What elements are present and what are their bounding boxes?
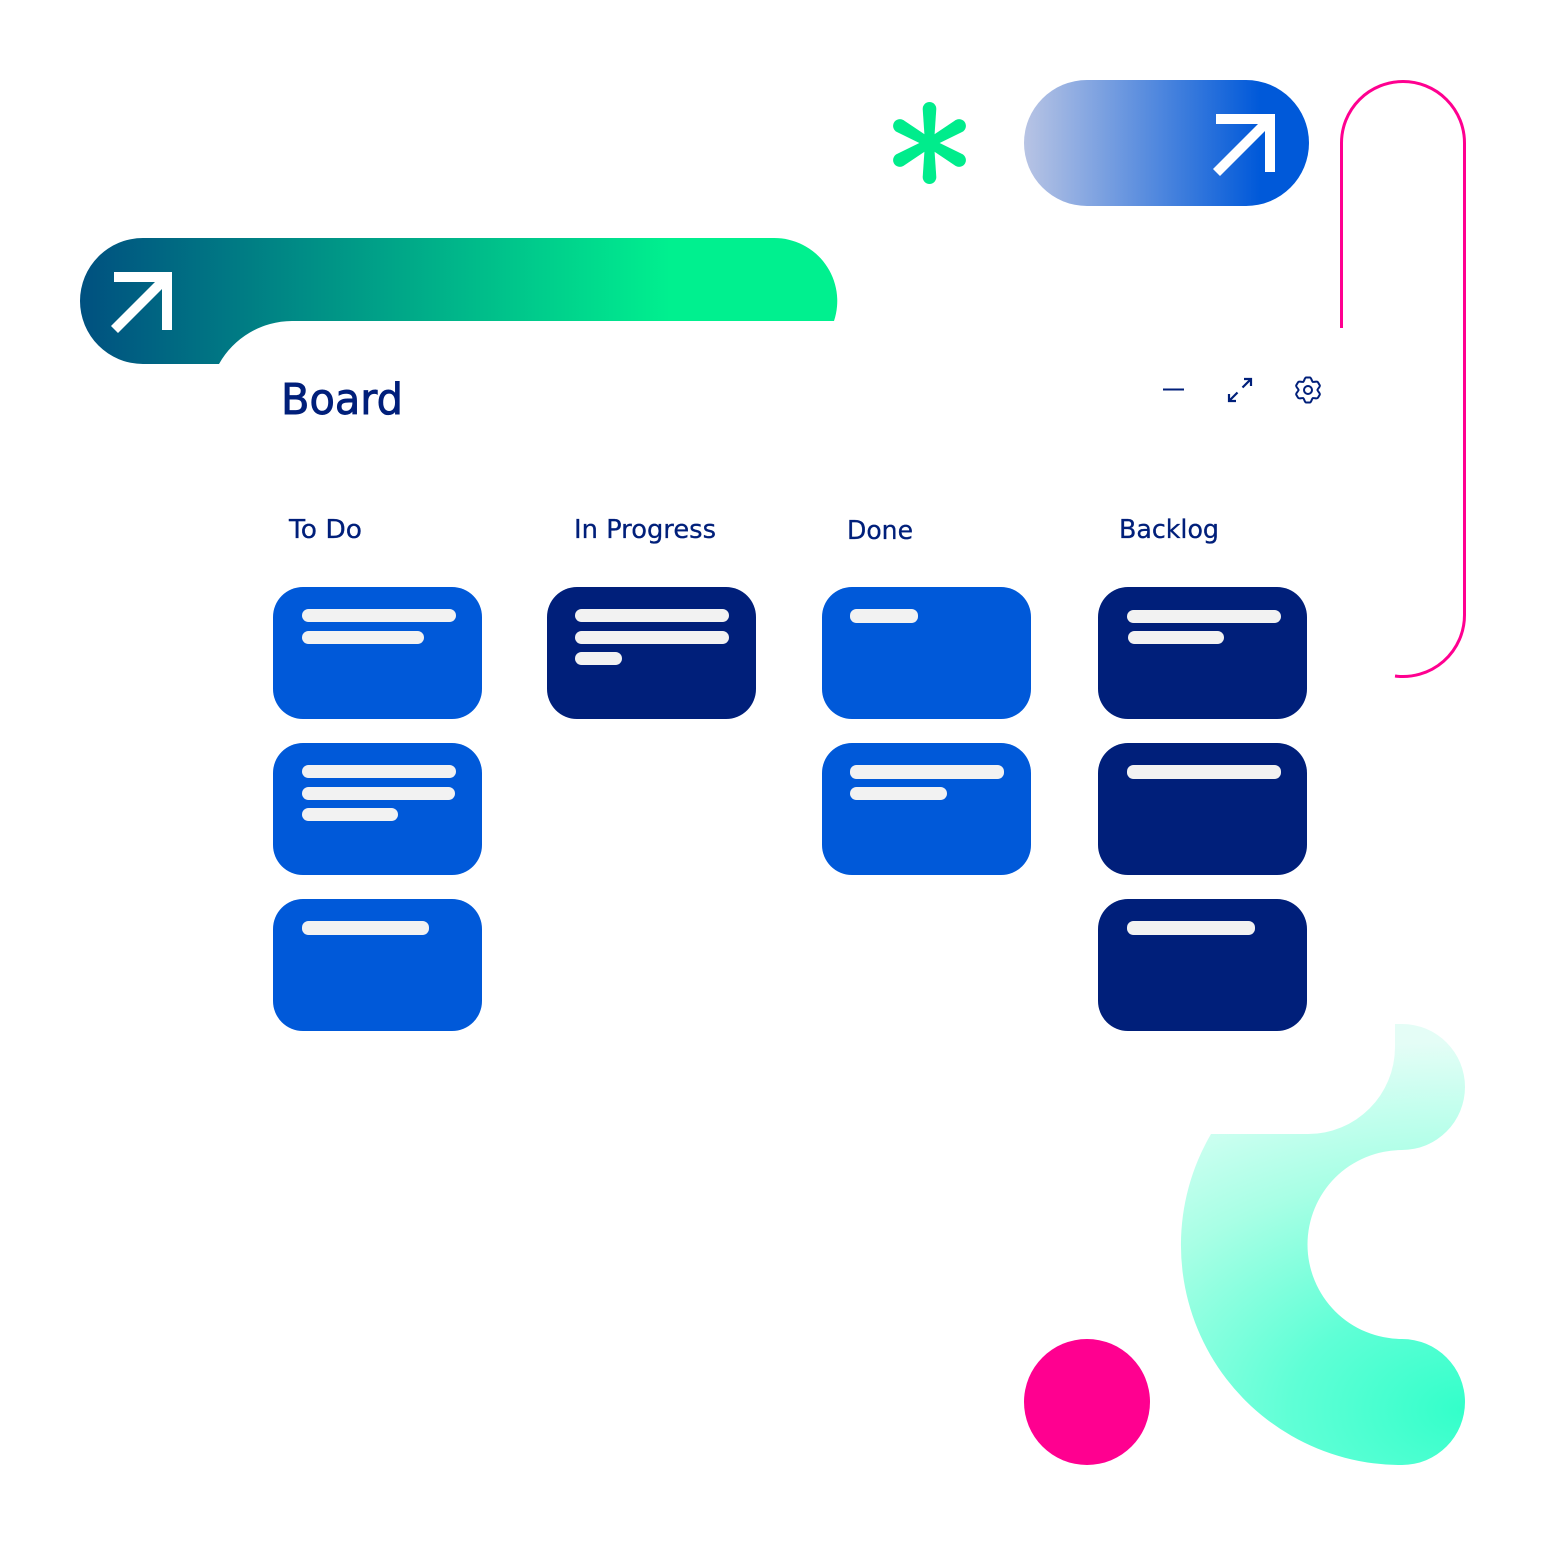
icon: minimize (1163, 388, 1184, 390)
mint gradient curved shape (1181, 1024, 1465, 1465)
board title: Board (281, 375, 403, 425)
green asterisk (891, 102, 968, 184)
heading: To Do: To Do (288, 515, 362, 545)
icon: settings gear (1295, 378, 1321, 402)
card 2 (1098, 743, 1307, 875)
card 2 (273, 743, 482, 875)
column: Done (822, 516, 1031, 875)
heading: Backlog: Backlog (1119, 515, 1219, 545)
card 3 (1098, 899, 1307, 1031)
pink circle (1024, 1339, 1150, 1465)
card 2 (822, 743, 1031, 875)
heading: Done: Done (847, 516, 913, 546)
icon: expand (1229, 379, 1251, 401)
green gradient banner with arrow (80, 238, 837, 364)
card 1 (822, 587, 1031, 719)
card 3 (273, 899, 482, 1031)
card 1 (1098, 587, 1307, 719)
card 1 (547, 587, 756, 719)
pink outline connector (1342, 81, 1465, 677)
card 1 (273, 587, 482, 719)
column: To Do (273, 515, 482, 1031)
blue gradient pill with arrow (1024, 80, 1309, 206)
column: Backlog (1098, 515, 1307, 1031)
heading: In Progress: In Progress (574, 515, 716, 545)
column: In Progress (547, 515, 756, 719)
